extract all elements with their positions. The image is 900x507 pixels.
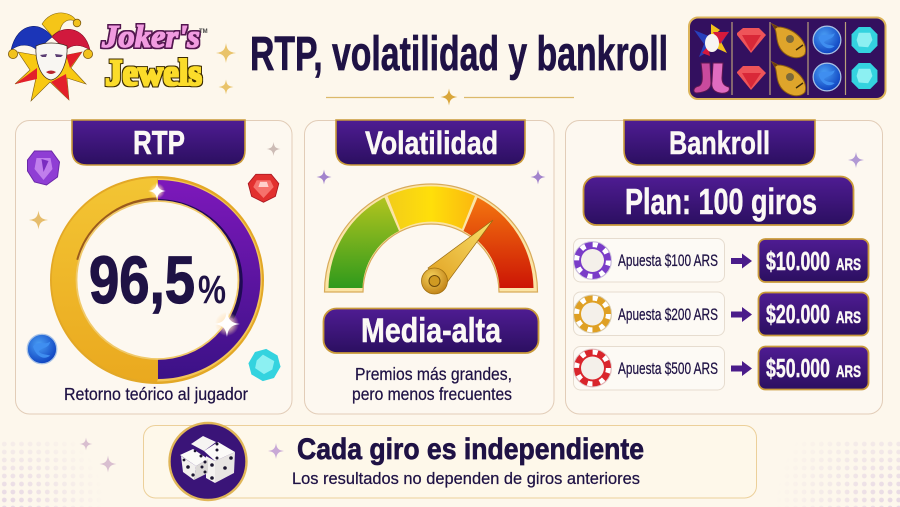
arrow — [731, 361, 752, 376]
gem: purple — [28, 151, 60, 185]
row: $100 — [574, 238, 868, 282]
trademark: TM — [199, 29, 208, 35]
chip: red — [574, 349, 612, 387]
sparkles: bottom left — [80, 438, 116, 472]
sparkles — [316, 170, 546, 184]
value box — [758, 292, 868, 336]
icon: jester — [8, 13, 93, 101]
value: 96,5%: 96,5 — [89, 243, 195, 318]
logo text: Joker's: Joker's — [101, 18, 200, 54]
row: $500 — [574, 346, 868, 390]
slot reels panel — [689, 18, 886, 99]
callout subtext: Los resultados no dependen de giros anteriores — [292, 469, 640, 488]
heading tab: RTP — [72, 120, 245, 165]
chip: purple — [574, 242, 612, 280]
logo: Joker's Jewels — [8, 13, 208, 101]
arrow — [731, 307, 752, 322]
panel: RTP — [16, 120, 292, 414]
icon: gold sparkles by title — [216, 43, 236, 94]
value pill: Media-alta: Media-alta — [361, 312, 502, 350]
caption — [352, 364, 512, 404]
reel symbol: jester shoes — [694, 63, 729, 93]
reel symbol: jester — [694, 24, 729, 57]
gem: red — [248, 174, 279, 202]
heading tab: Volatilidad: Volatilidad — [365, 125, 498, 161]
callout: independent spins — [144, 423, 756, 500]
plan pill — [584, 176, 854, 225]
arrow — [731, 254, 752, 268]
heading tab: Bankroll: Bankroll — [669, 125, 770, 161]
title divider with diamond — [326, 88, 574, 106]
value: $20.000 ARS: ARS — [836, 308, 861, 327]
value: $20.000 ARS: $20.000 — [766, 299, 830, 329]
gauge — [324, 184, 538, 294]
gem: cyan — [244, 345, 285, 385]
sparkle — [268, 443, 284, 459]
caption: Retorno teórico al jugador — [64, 384, 248, 404]
value: $50.000 ARS: ARS — [836, 362, 861, 381]
row: $100: Apuesta $100 ARS — [618, 251, 718, 270]
logo text: Jewels: Jewels — [105, 53, 202, 94]
reel symbol: lutes — [772, 24, 806, 96]
panel box — [16, 120, 292, 414]
value: 96,5%: % — [198, 268, 226, 312]
value: $50.000 ARS: $50.000 — [766, 353, 830, 383]
caption: pero menos frecuentes — [352, 384, 512, 404]
value box — [758, 346, 868, 390]
reel symbol: cyan gems — [852, 27, 877, 89]
heading tab: RTP: RTP — [133, 124, 185, 161]
panel: Bankroll — [566, 120, 882, 414]
callout heading: Cada giro es independiente — [297, 433, 644, 466]
value: $10.000 ARS: ARS — [836, 255, 861, 274]
panel box — [566, 120, 882, 414]
sparkle — [848, 152, 864, 168]
value pill: Media-alta — [324, 308, 538, 353]
panel box — [304, 120, 554, 414]
value box — [758, 239, 868, 282]
reel symbol: red gems — [737, 28, 766, 90]
caption: Premios más grandes, — [355, 364, 512, 384]
plan pill: Plan: 100 giros — [625, 181, 817, 222]
callout box — [144, 426, 756, 498]
sparkle on ring — [214, 311, 240, 337]
needle — [428, 220, 493, 284]
row: $200 — [574, 292, 868, 336]
row: $200: Apuesta $200 ARS — [618, 305, 718, 324]
heading tab: Bankroll — [624, 120, 815, 165]
value: $10.000 ARS: $10.000 — [766, 246, 830, 276]
sparkle on ring — [148, 182, 166, 200]
chip: gold — [574, 295, 612, 333]
row: $500: Apuesta $500 ARS — [618, 359, 718, 378]
title: RTP, volatilidad y bankroll — [250, 28, 668, 81]
sparkle: grey — [266, 142, 280, 156]
icon: dice — [170, 423, 246, 500]
gem: blue — [27, 334, 57, 364]
halftone dots right — [810, 442, 900, 507]
sparkle: gold — [29, 210, 48, 230]
reel symbol: blue gems — [813, 26, 841, 91]
panel: Volatilidad — [304, 120, 554, 414]
donut chart: 96,5% — [50, 176, 264, 384]
needle hub — [422, 268, 448, 294]
halftone dots left — [2, 442, 80, 507]
heading tab: Volatilidad — [336, 120, 525, 165]
